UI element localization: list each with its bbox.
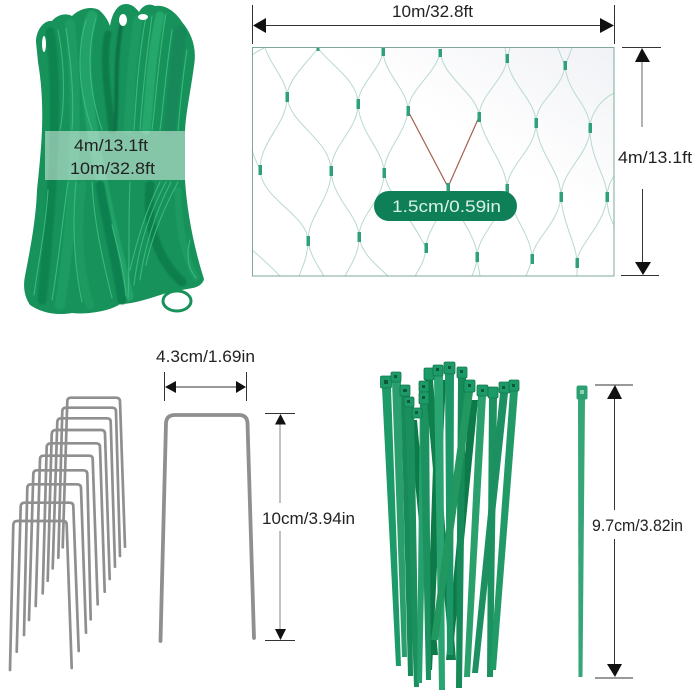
bundle size label: 10m/32.8ft — [70, 159, 155, 178]
net background — [252, 48, 614, 276]
red measure lines — [408, 111, 479, 187]
tie length label: 9.7cm/3.82in — [592, 516, 683, 535]
net loops and strands — [42, 16, 196, 305]
arrow: staple height — [265, 414, 295, 640]
mesh knots — [258, 47, 609, 268]
bundle size label — [70, 136, 155, 178]
staple width label: 4.3cm/1.69in — [156, 347, 255, 366]
bottom net loop — [163, 291, 191, 311]
net mesh — [252, 48, 614, 276]
arrow: net height — [621, 48, 661, 276]
translucent label band — [45, 131, 185, 180]
mesh size callout: 1.5cm/0.59in — [392, 197, 501, 216]
panel: cable ties bundle — [380, 362, 519, 690]
single cable tie — [576, 386, 588, 677]
panel: rolled green net bundle — [24, 4, 204, 314]
bundle size label: 4m/13.1ft — [74, 136, 148, 155]
single ground staple — [160, 415, 254, 641]
panel: unfolded net diagram — [252, 2, 692, 276]
tie head holes — [384, 366, 515, 414]
panel: single cable tie diagram — [576, 385, 683, 678]
net width label: 10m/32.8ft — [392, 2, 473, 21]
arrow: net width — [252, 5, 614, 44]
panel: ground staples stack — [10, 398, 125, 670]
tie heads — [380, 362, 519, 418]
bundle silhouette — [24, 4, 204, 314]
mesh size callout — [374, 191, 517, 221]
tie strips — [382, 374, 518, 690]
fine highlight strands — [34, 14, 196, 302]
top loop openings — [42, 14, 148, 52]
arrow: staple width — [164, 372, 246, 401]
arrow: tie length — [595, 385, 633, 678]
net border — [252, 48, 614, 276]
panel: single staple diagram — [156, 347, 355, 641]
net height label: 4m/13.1ft — [618, 148, 692, 167]
staple height label: 10cm/3.94in — [262, 509, 355, 528]
